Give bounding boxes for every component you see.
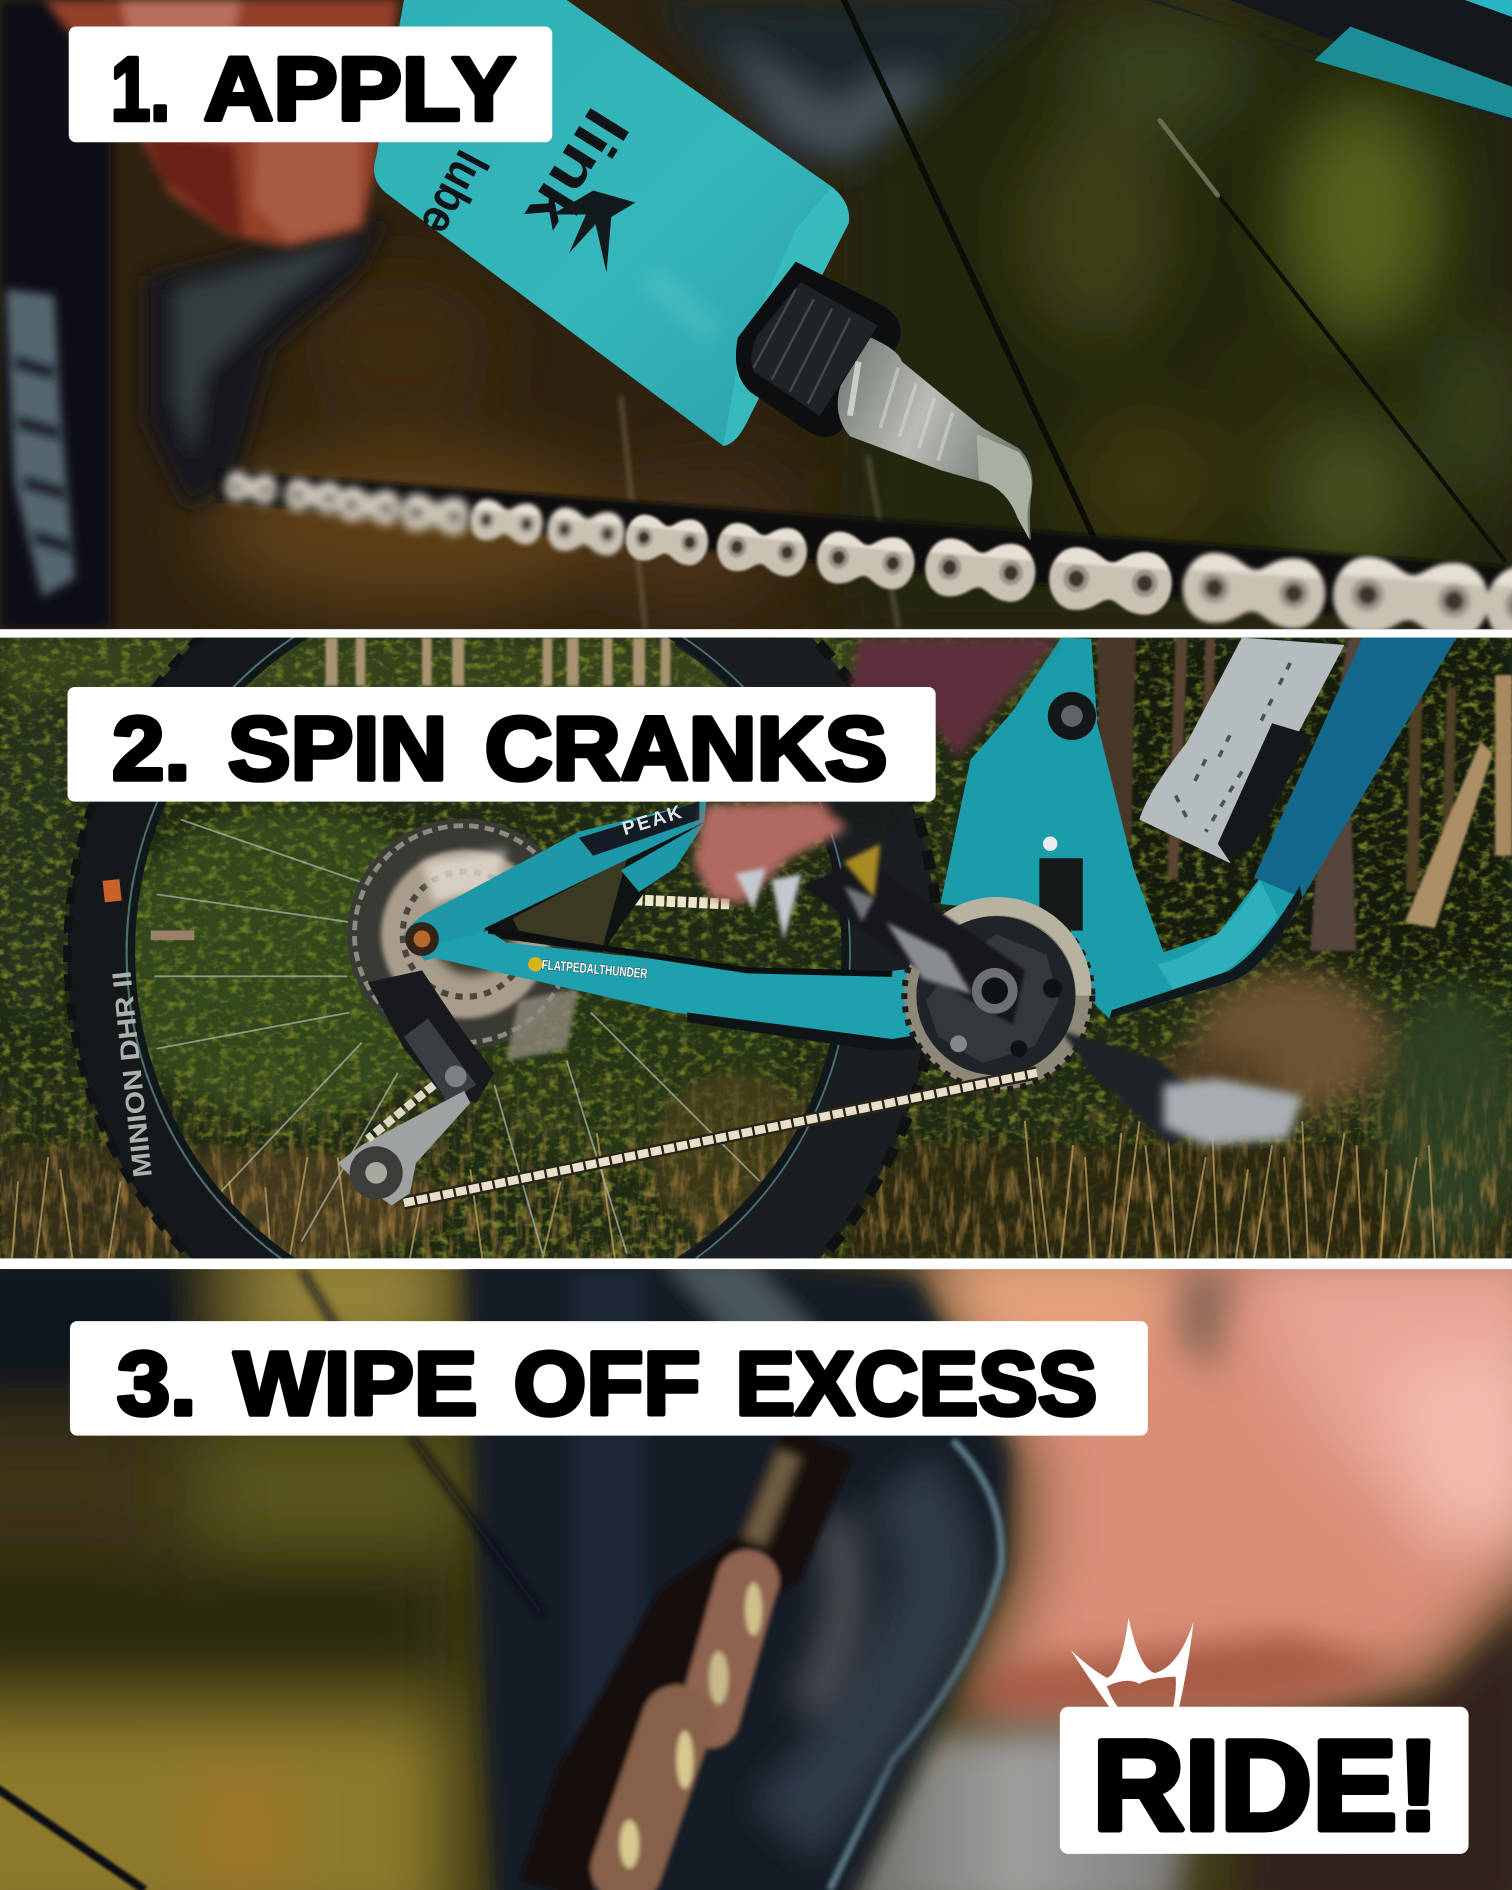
- foreground spoke: [0, 1786, 145, 1890]
- lower dry grass ground: [0, 970, 1512, 1260]
- rider arm and hand: [693, 638, 1059, 904]
- cassette: [347, 818, 579, 1061]
- frame in corner: [1145, 0, 1512, 123]
- label: 2. SPIN CRANKS: CRANKS: [485, 698, 887, 799]
- label: 2. SPIN CRANKS: 2.: [112, 698, 191, 799]
- label: 1. APPLY: 1.: [111, 39, 170, 140]
- frame dark band: [464, 1254, 1010, 1890]
- grass blades: [12, 1121, 1435, 1258]
- tire sidewall text: MINION DHR II: [106, 970, 158, 1179]
- water bottle: [1139, 638, 1344, 863]
- gray fabric: [832, 1724, 1206, 1890]
- bottle lettering: lube: [410, 142, 499, 244]
- label: 3. WIPE OFF EXCESS: [70, 1321, 1148, 1436]
- lower chain: [404, 1073, 1037, 1203]
- dry grass texture: [0, 1037, 1512, 1258]
- spokes: [621, 0, 1505, 627]
- bottle lettering: [410, 96, 641, 244]
- towel edge: [784, 1440, 1001, 1890]
- upper chain: [591, 898, 729, 904]
- label: 3. WIPE OFF EXCESS: EXCESS: [736, 1333, 1097, 1434]
- lower right dark: [1242, 1603, 1512, 1890]
- callout: RIDE!: RIDE!: [1092, 1715, 1440, 1858]
- valve: [151, 931, 194, 940]
- label: 1. APPLY: APPLY: [204, 39, 516, 140]
- bottle nozzle: [838, 338, 1032, 540]
- chainring: [904, 897, 1092, 1090]
- main frame: [940, 638, 1453, 1019]
- tire sidewall text: [103, 879, 158, 1179]
- hand: [916, 1229, 1512, 1718]
- icon: crown: [1071, 1618, 1194, 1707]
- dropout axle: [405, 922, 439, 956]
- seatstay shadow: [482, 810, 705, 952]
- panel: spin cranks photo: [0, 494, 1512, 1410]
- foliage texture: [0, 638, 1512, 1258]
- decal text: PEAK: [620, 802, 686, 840]
- label: 3. WIPE OFF EXCESS: OFF: [514, 1333, 701, 1434]
- label: 3. WIPE OFF EXCESS: 3.: [117, 1333, 197, 1434]
- wheel spokes: [154, 820, 760, 1254]
- fork: [0, 0, 111, 629]
- backdrop colour patches: [0, 638, 1512, 1169]
- blurred background: [0, 1229, 1512, 1890]
- label: 1. APPLY: [69, 27, 552, 142]
- chainstay: [410, 931, 926, 1041]
- decal text: [541, 802, 686, 981]
- bottle cap: [736, 262, 901, 437]
- icon: lube bottle: [374, 0, 1032, 540]
- panel: wipe off excess photo: [0, 1229, 1512, 1890]
- rear tire: [27, 494, 938, 1410]
- label: 3. WIPE OFF EXCESS: WIPE: [234, 1333, 477, 1434]
- seatstay: [404, 800, 707, 961]
- background blur: drivetrain top: [651, 0, 1049, 169]
- bottle body: [374, 0, 849, 446]
- bike frame: [404, 638, 1457, 1051]
- bottle lettering: link: [512, 96, 641, 244]
- background blur: olive foliage: [205, 0, 1512, 629]
- forest trunks: [326, 638, 1512, 951]
- panel: apply photo: [0, 0, 1512, 653]
- pivot: [1048, 692, 1096, 740]
- bottle crown logo: [552, 190, 635, 272]
- crank arm: [736, 844, 1302, 1145]
- label: 2. SPIN CRANKS: SPIN: [228, 698, 447, 799]
- label: 2. SPIN CRANKS: [68, 687, 936, 802]
- derailleur: [338, 970, 494, 1205]
- blurred chain: [555, 1440, 820, 1890]
- decal text: FLATPEDALTHUNDER: [541, 956, 648, 981]
- chain: [217, 470, 1512, 653]
- hand: [43, 0, 398, 247]
